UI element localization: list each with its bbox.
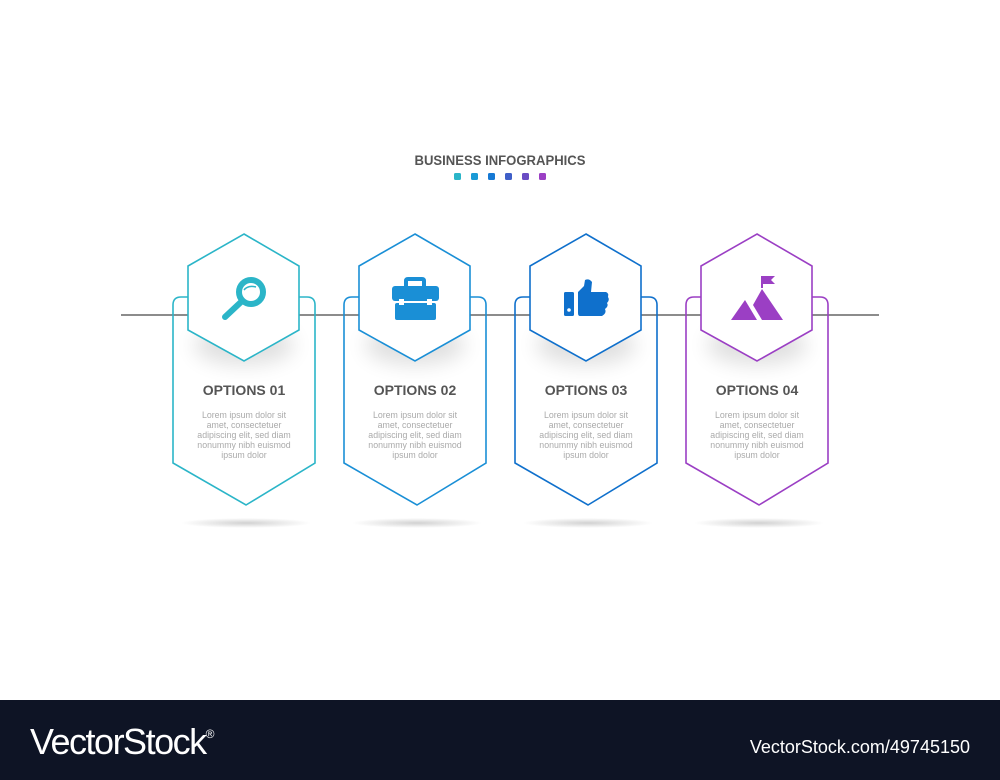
panel: options 04: ipsum dolor: [734, 450, 780, 460]
panel: options 02: Lorem ipsum dolor sit: [373, 410, 458, 420]
panel: options 01: nonummy nibh euismod: [197, 440, 291, 450]
footer bar: ®: [206, 727, 215, 741]
footer bar: [0, 700, 1000, 780]
icon: mountain flag: [731, 276, 783, 320]
panel: options 01: Lorem ipsum dolor sit: [202, 410, 287, 420]
panel: options 01: ipsum dolor: [221, 450, 267, 460]
panel: options 04: [686, 234, 828, 528]
panel: options 03: adipiscing elit, sed diam: [539, 430, 633, 440]
title dots: [454, 173, 546, 180]
panel: options 03: nonummy nibh euismod: [539, 440, 633, 450]
title: BUSINESS INFOGRAPHICS: [414, 153, 586, 168]
panel: options 02: adipiscing elit, sed diam: [368, 430, 462, 440]
panel: options 02: ipsum dolor: [392, 450, 438, 460]
panel: options 01: adipiscing elit, sed diam: [197, 430, 291, 440]
panel: options 01: OPTIONS 01: [203, 382, 285, 398]
panel: options 04: amet, consectetuer: [720, 420, 794, 430]
panel: options 02: nonummy nibh euismod: [368, 440, 462, 450]
panel: options 01: amet, consectetuer: [207, 420, 281, 430]
footer bar: VectorStock.com/49745150: [750, 737, 970, 757]
panel: options 01: [173, 234, 315, 528]
footer bar: VectorStock: [30, 721, 206, 762]
timeline line: [121, 314, 879, 316]
icon: thumbs up: [564, 279, 609, 316]
panel: options 02: OPTIONS 02: [374, 382, 456, 398]
panel: options 03: OPTIONS 03: [545, 382, 627, 398]
panel: options 04: adipiscing elit, sed diam: [710, 430, 804, 440]
panel: options 03: amet, consectetuer: [549, 420, 623, 430]
icon: briefcase: [392, 277, 439, 320]
panel: options 02: amet, consectetuer: [378, 420, 452, 430]
panel: options 03: [515, 234, 657, 528]
panel: options 02: [344, 234, 486, 528]
panel: options 04: nonummy nibh euismod: [710, 440, 804, 450]
icon: magnifier: [225, 280, 263, 317]
panel: options 04: Lorem ipsum dolor sit: [715, 410, 800, 420]
panel: options 03: ipsum dolor: [563, 450, 609, 460]
panel: options 04: OPTIONS 04: [716, 382, 798, 398]
panel: options 03: Lorem ipsum dolor sit: [544, 410, 629, 420]
